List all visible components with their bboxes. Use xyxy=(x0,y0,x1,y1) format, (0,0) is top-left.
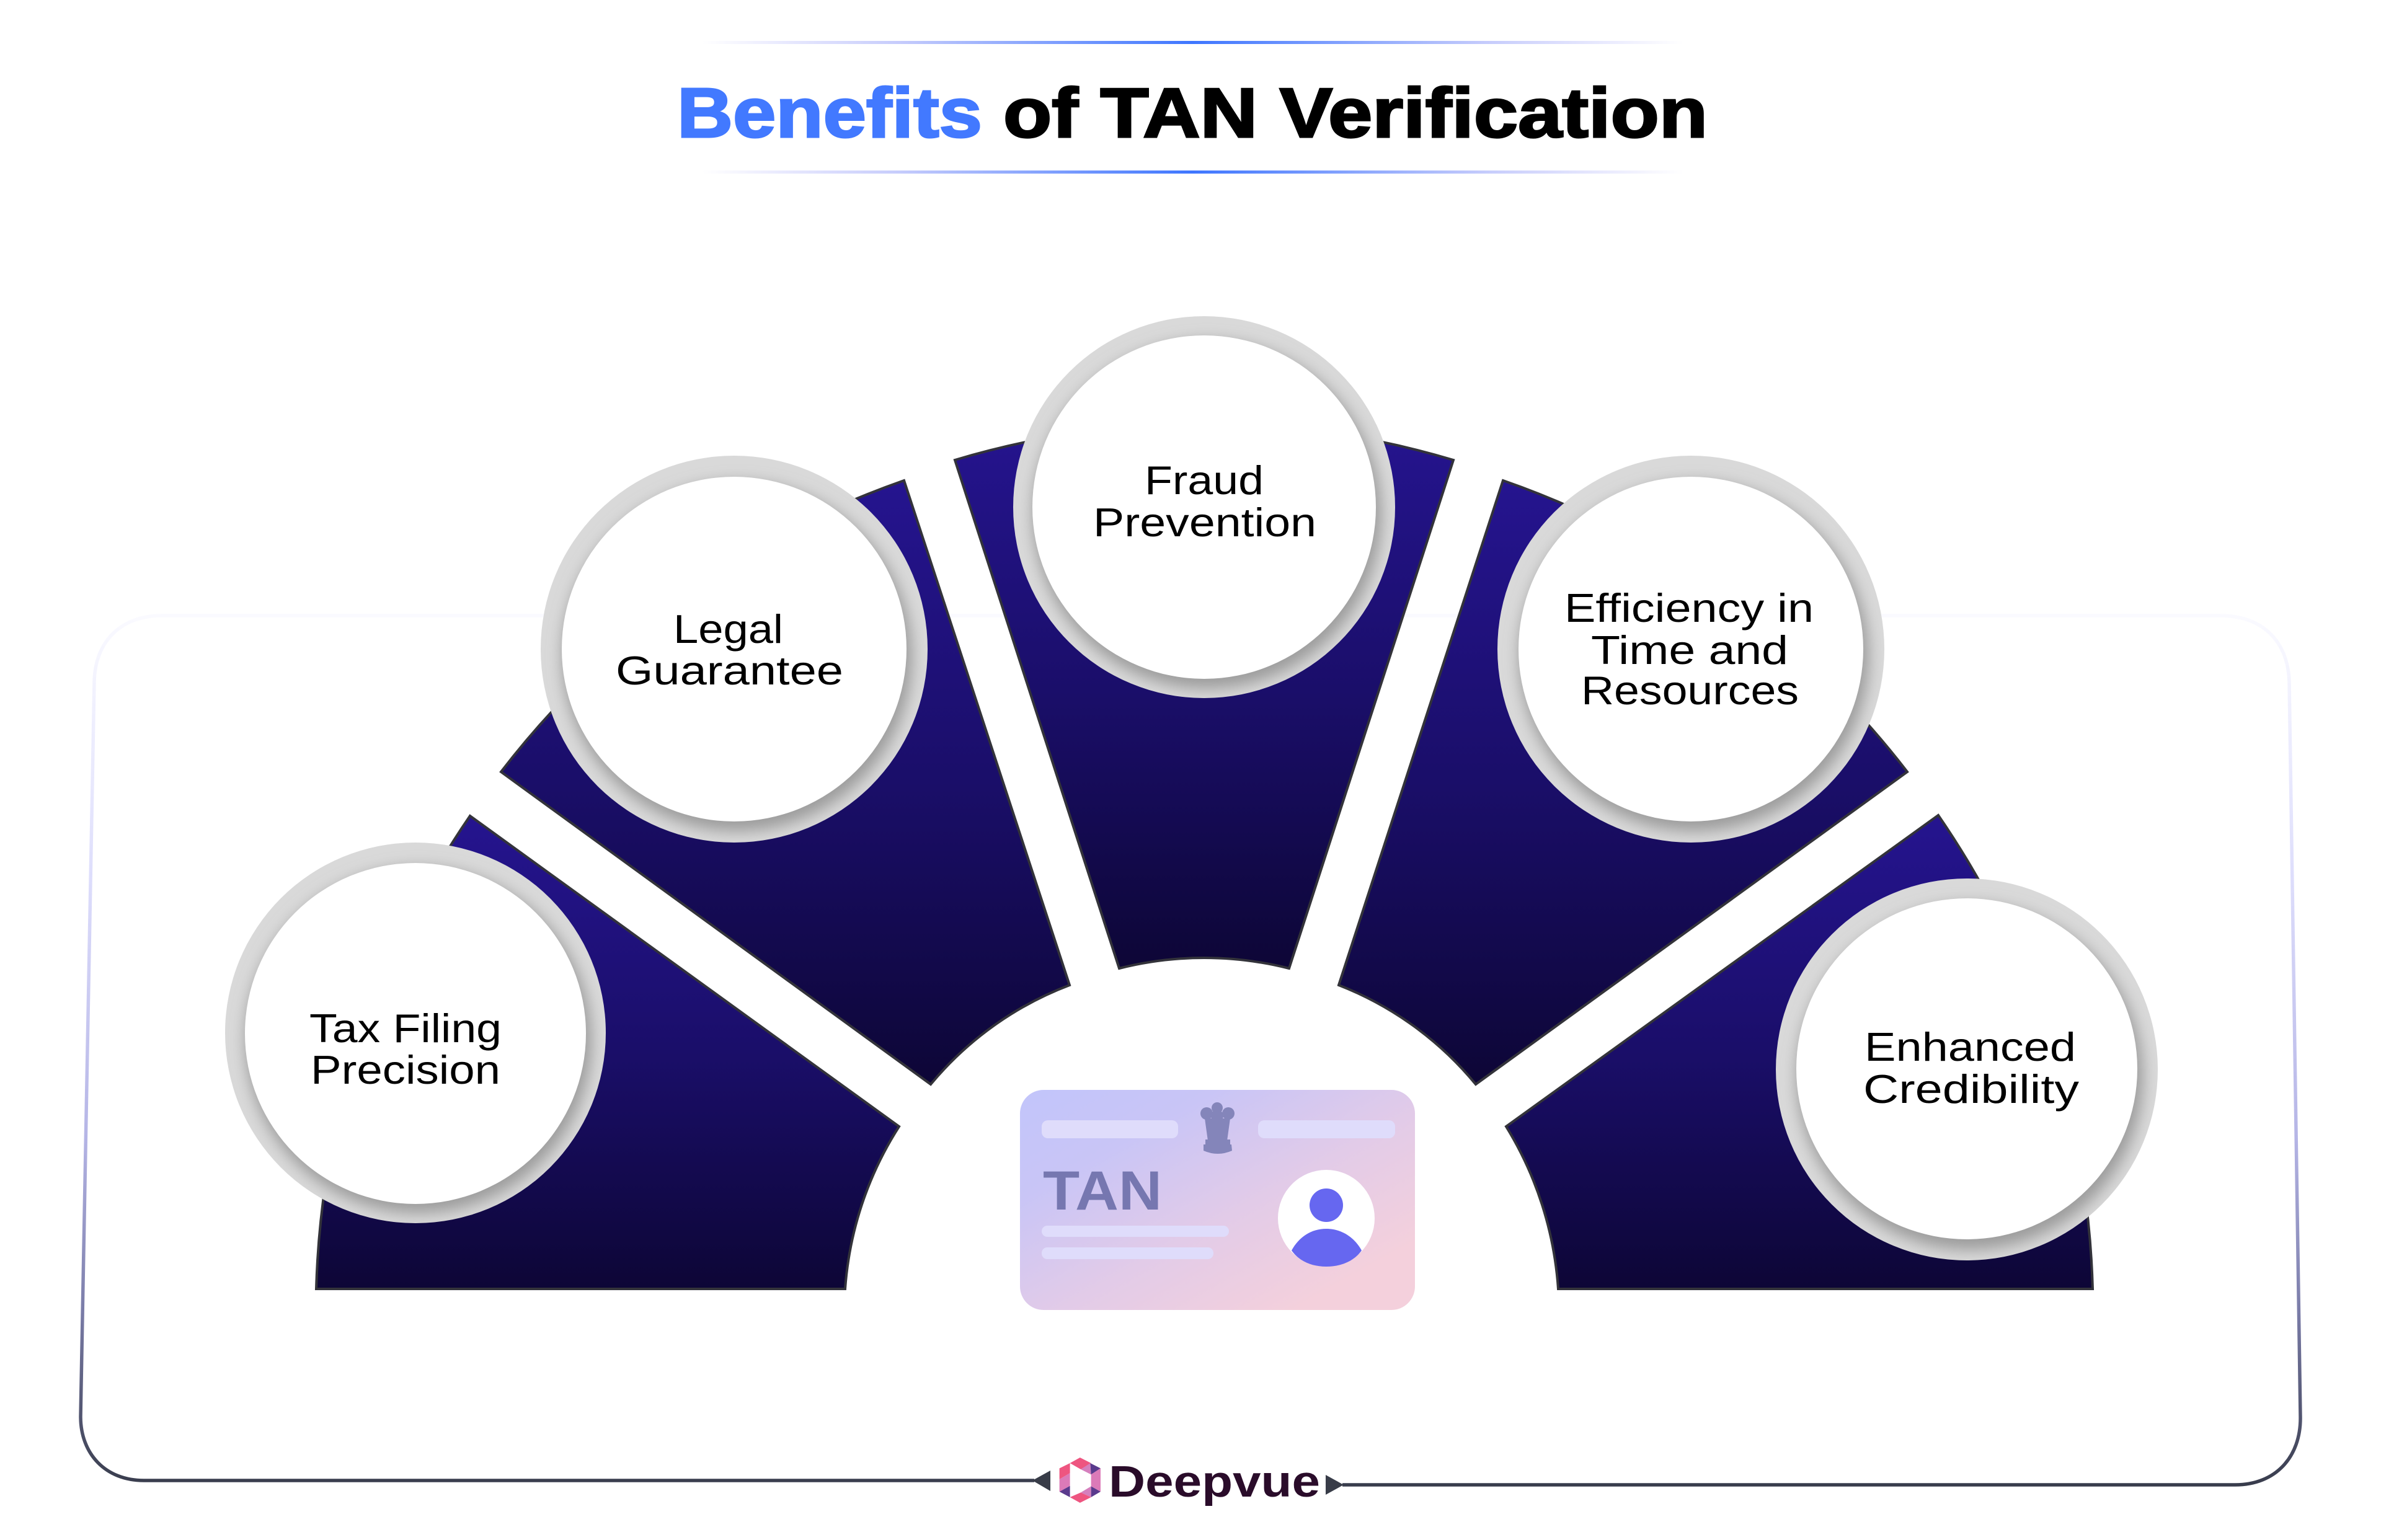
label text: Legal xyxy=(673,606,783,652)
arrow: left line end xyxy=(1032,1471,1050,1491)
wordmark: Deepvue xyxy=(1109,1458,1320,1507)
icon: user avatar xyxy=(1278,1170,1375,1267)
segment: efficiency xyxy=(1339,480,1907,1084)
panel frame xyxy=(81,616,2300,1485)
label text: Prevention xyxy=(1093,500,1316,545)
label text: Precision xyxy=(311,1047,500,1092)
label text: Credibility xyxy=(1863,1066,2080,1112)
segment: enhanced credibility xyxy=(1506,815,2093,1289)
decorative rule above title xyxy=(703,41,1683,44)
label text: Tax Filing xyxy=(309,1006,502,1051)
decorative rule below title xyxy=(703,170,1683,174)
label text: Efficiency in xyxy=(1564,585,1814,631)
label text: Resources xyxy=(1581,668,1799,713)
Deepvue logo xyxy=(1060,1458,1320,1507)
segment: tax filing xyxy=(316,816,899,1289)
arrow: right line end xyxy=(1326,1475,1344,1495)
circle: Enhanced Credibility xyxy=(1776,878,2158,1260)
segment: fraud prevention xyxy=(955,423,1453,968)
icon: national emblem xyxy=(1200,1102,1235,1154)
title text: of TAN Verification xyxy=(1003,74,1708,152)
title text: Benefits xyxy=(677,74,982,152)
label text: Time and xyxy=(1591,627,1788,673)
circle: Efficiency in Time and Resources xyxy=(1497,456,1884,843)
circle: Tax Filing Precision xyxy=(225,843,606,1223)
label text: Enhanced xyxy=(1864,1024,2076,1069)
circle: Fraud Prevention xyxy=(1013,316,1395,698)
label text: Fraud xyxy=(1145,458,1264,503)
fan chart: five benefit segments xyxy=(316,423,2093,1289)
TAN card xyxy=(1020,1090,1415,1310)
circle: Legal Guarantee xyxy=(541,456,928,843)
label text: Guarantee xyxy=(616,648,843,693)
title xyxy=(677,41,1708,174)
segment: legal guarantee xyxy=(501,480,1070,1084)
card heading: TAN xyxy=(1043,1159,1162,1221)
icon: hexagon mark xyxy=(1060,1458,1101,1503)
